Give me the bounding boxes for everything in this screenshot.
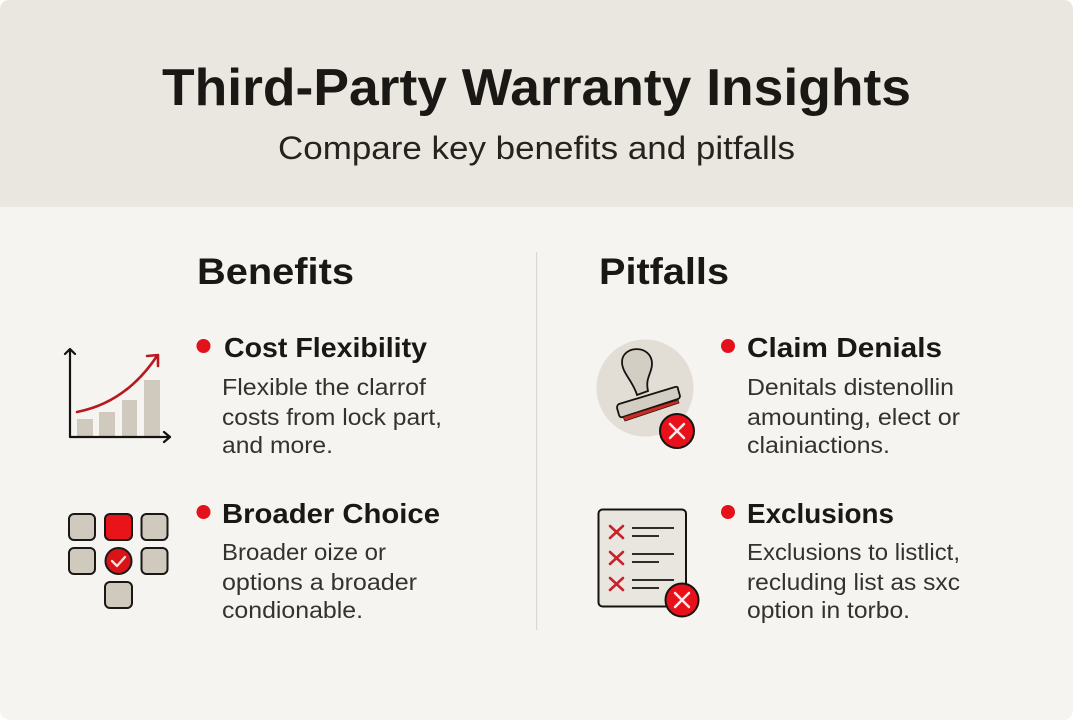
item text: exclusions: Exclusions to listlict, bbox=[747, 539, 960, 565]
item text: claim denials bbox=[747, 374, 960, 458]
item title: exclusions: Exclusions bbox=[747, 498, 894, 529]
bullet: exclusions bbox=[721, 505, 735, 519]
header band bbox=[0, 0, 1073, 207]
item text: claim denials: clainiactions. bbox=[747, 432, 890, 458]
bullet: claim denials bbox=[721, 339, 735, 353]
item title: claim denials: Claim Denials bbox=[747, 332, 942, 363]
column divider bbox=[536, 252, 537, 630]
icon: exclusions checklist bbox=[598, 510, 698, 616]
item text: exclusions: option in torbo. bbox=[747, 597, 910, 623]
item text: cost flexibility: Flexible the clarrof bbox=[222, 374, 427, 400]
item text: claim denials: amounting, elect or bbox=[747, 404, 960, 430]
subtitle: Compare key benefits and pitfalls bbox=[278, 130, 795, 166]
item text: exclusions: recluding list as sxc bbox=[747, 569, 960, 595]
item text: cost flexibility bbox=[222, 374, 442, 458]
item text: cost flexibility: costs from lock part, bbox=[222, 404, 442, 430]
title: Third-Party Warranty Insights bbox=[162, 59, 911, 117]
icon: rejected stamp bbox=[596, 340, 694, 448]
item text: cost flexibility: and more. bbox=[222, 432, 333, 458]
icon: rising bar chart bbox=[65, 349, 170, 442]
item text: broader choice: options a broader bbox=[222, 569, 417, 595]
item text: claim denials: Denitals distenollin bbox=[747, 374, 954, 400]
item text: exclusions bbox=[747, 539, 960, 623]
icon: choice grid bbox=[69, 514, 168, 608]
item text: broader choice: Broader oize or bbox=[222, 539, 386, 565]
item text: broader choice bbox=[222, 539, 417, 623]
item title: broader choice: Broader Choice bbox=[222, 498, 440, 529]
item text: broader choice: condionable. bbox=[222, 597, 363, 623]
bullet: broader choice bbox=[196, 505, 210, 519]
heading: pitfalls: Pitfalls bbox=[599, 251, 729, 292]
heading: benefits: Benefits bbox=[197, 251, 354, 292]
item title: cost flexibility: Cost Flexibility bbox=[224, 332, 427, 363]
bullet: cost flexibility bbox=[196, 339, 210, 353]
